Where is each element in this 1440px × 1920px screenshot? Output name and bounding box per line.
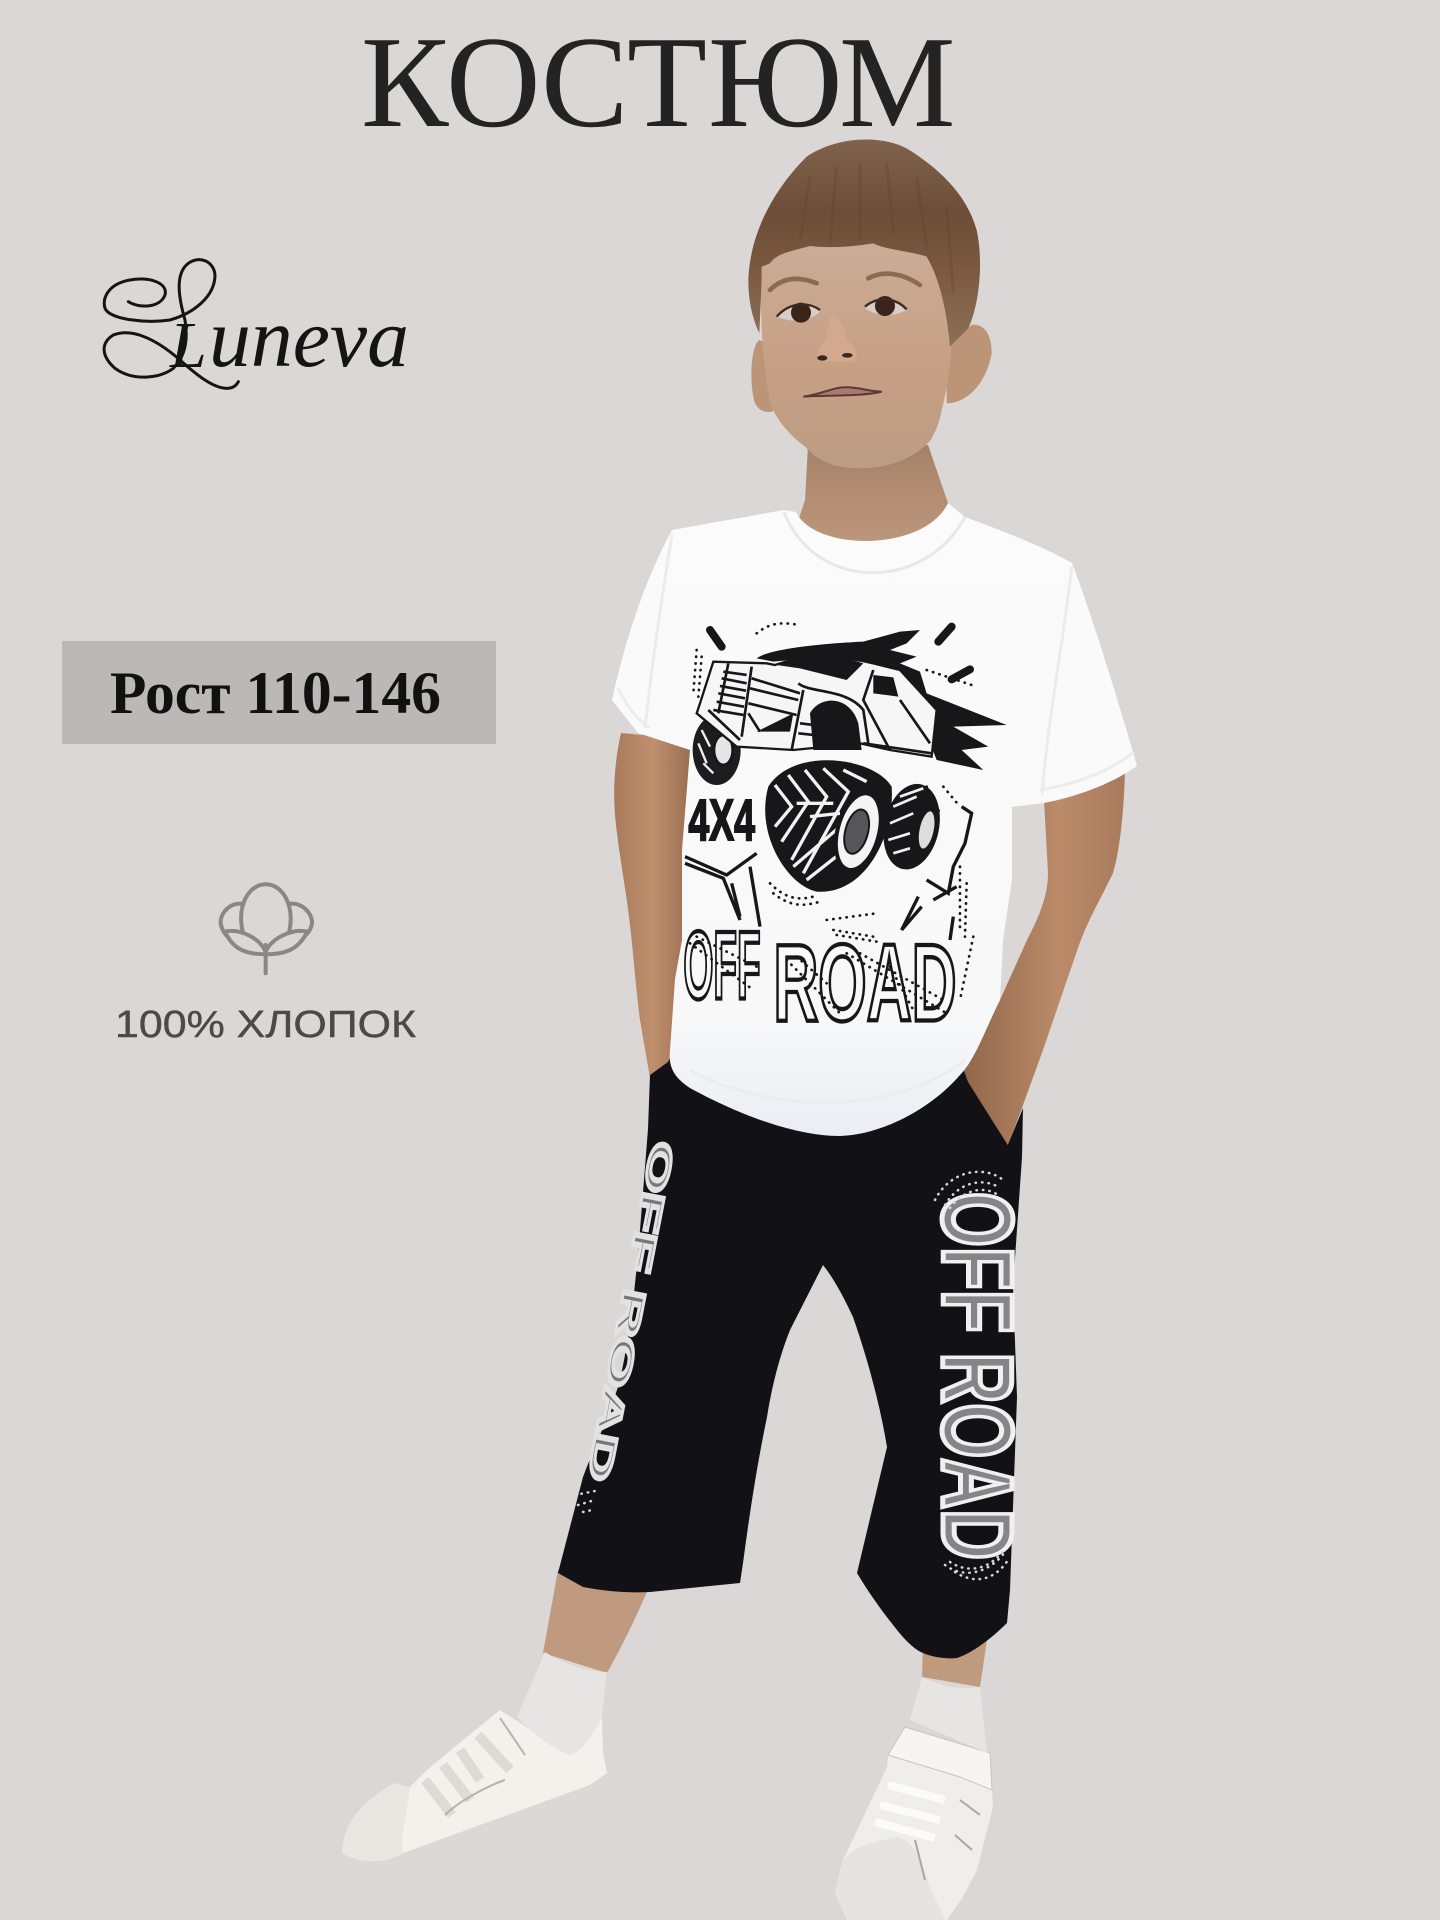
- icon: cotton boll: [221, 884, 312, 973]
- face: [761, 220, 953, 468]
- right arm: [960, 770, 1125, 1148]
- shorts body: [558, 1040, 1022, 1658]
- right shoe body: [835, 1727, 993, 1920]
- print: rear left wheel: [693, 715, 741, 785]
- print: tire treads: [775, 768, 867, 880]
- eyebrows: [770, 274, 920, 290]
- left shoe strap: [445, 1718, 525, 1815]
- badge text: Рост 110-146: [110, 660, 441, 726]
- logo flourish: [104, 260, 238, 388]
- left ear: [751, 340, 775, 412]
- logo: Luneva: [104, 260, 409, 388]
- hair: [748, 140, 980, 347]
- mouth: [803, 387, 882, 397]
- print: off road lettering: ROAD: [773, 922, 957, 1045]
- height badge: [62, 641, 496, 744]
- cotton label: 100% ХЛОПОК: [115, 1004, 416, 1046]
- print: 4x4: 4X4: [688, 788, 755, 853]
- right shoe toe: [835, 1837, 945, 1920]
- nose: [818, 316, 857, 362]
- title: КОСТЮМ: [361, 10, 955, 155]
- print: truck windows and wheel arch: [757, 657, 898, 750]
- cotton badge: [115, 884, 416, 1046]
- right shoe laces: [875, 1785, 945, 1838]
- left shoe laces: [425, 1735, 510, 1815]
- shorts print: left leg: OFF ROAD: [580, 1139, 681, 1484]
- print: off road lettering: OFF: [683, 912, 761, 1019]
- print: rear right wheel: [876, 779, 947, 875]
- legs: [543, 1570, 987, 1687]
- print: off road lettering: [683, 912, 957, 1045]
- shorts print: right leg: OFF ROAD: [921, 1192, 1033, 1560]
- print: splash drops: [710, 627, 970, 679]
- badge background: [62, 641, 496, 744]
- hair strands: [800, 163, 953, 293]
- right ear: [947, 325, 992, 403]
- left eye: [777, 303, 820, 323]
- print: speckle: [690, 623, 977, 1013]
- head: [748, 140, 992, 468]
- boy figure: [342, 140, 1137, 1920]
- socks: [517, 1652, 987, 1755]
- shorts: [558, 1040, 1033, 1658]
- left shoe toe: [342, 1783, 410, 1861]
- print: hub: [828, 788, 888, 875]
- t-shirt print: [683, 623, 1007, 1045]
- right shoe: [835, 1727, 993, 1920]
- right eye: [865, 296, 907, 316]
- t-shirt: [612, 503, 1137, 1136]
- left shoe sole: [342, 1710, 613, 1880]
- neck: [785, 445, 965, 560]
- t-shirt seams: [618, 534, 1134, 1103]
- logo wordmark: uneva: [209, 292, 409, 385]
- left shoe: [342, 1710, 613, 1880]
- print: truck grille: [708, 663, 932, 753]
- left arm: [614, 733, 700, 1078]
- shorts pocket sliver: [1007, 1108, 1023, 1157]
- print: truck body: [697, 657, 937, 757]
- left shoe upper: [402, 1710, 607, 1853]
- right shoe strap: [888, 1727, 992, 1790]
- t-shirt body: [612, 503, 1137, 1136]
- shorts speckle: [575, 1172, 1008, 1579]
- print: front tire: [765, 760, 892, 892]
- logo initial: L: [169, 309, 207, 382]
- print: burst behind truck: [757, 630, 1007, 770]
- t-shirt collar: [784, 512, 965, 573]
- print: ground cracks: [685, 807, 972, 940]
